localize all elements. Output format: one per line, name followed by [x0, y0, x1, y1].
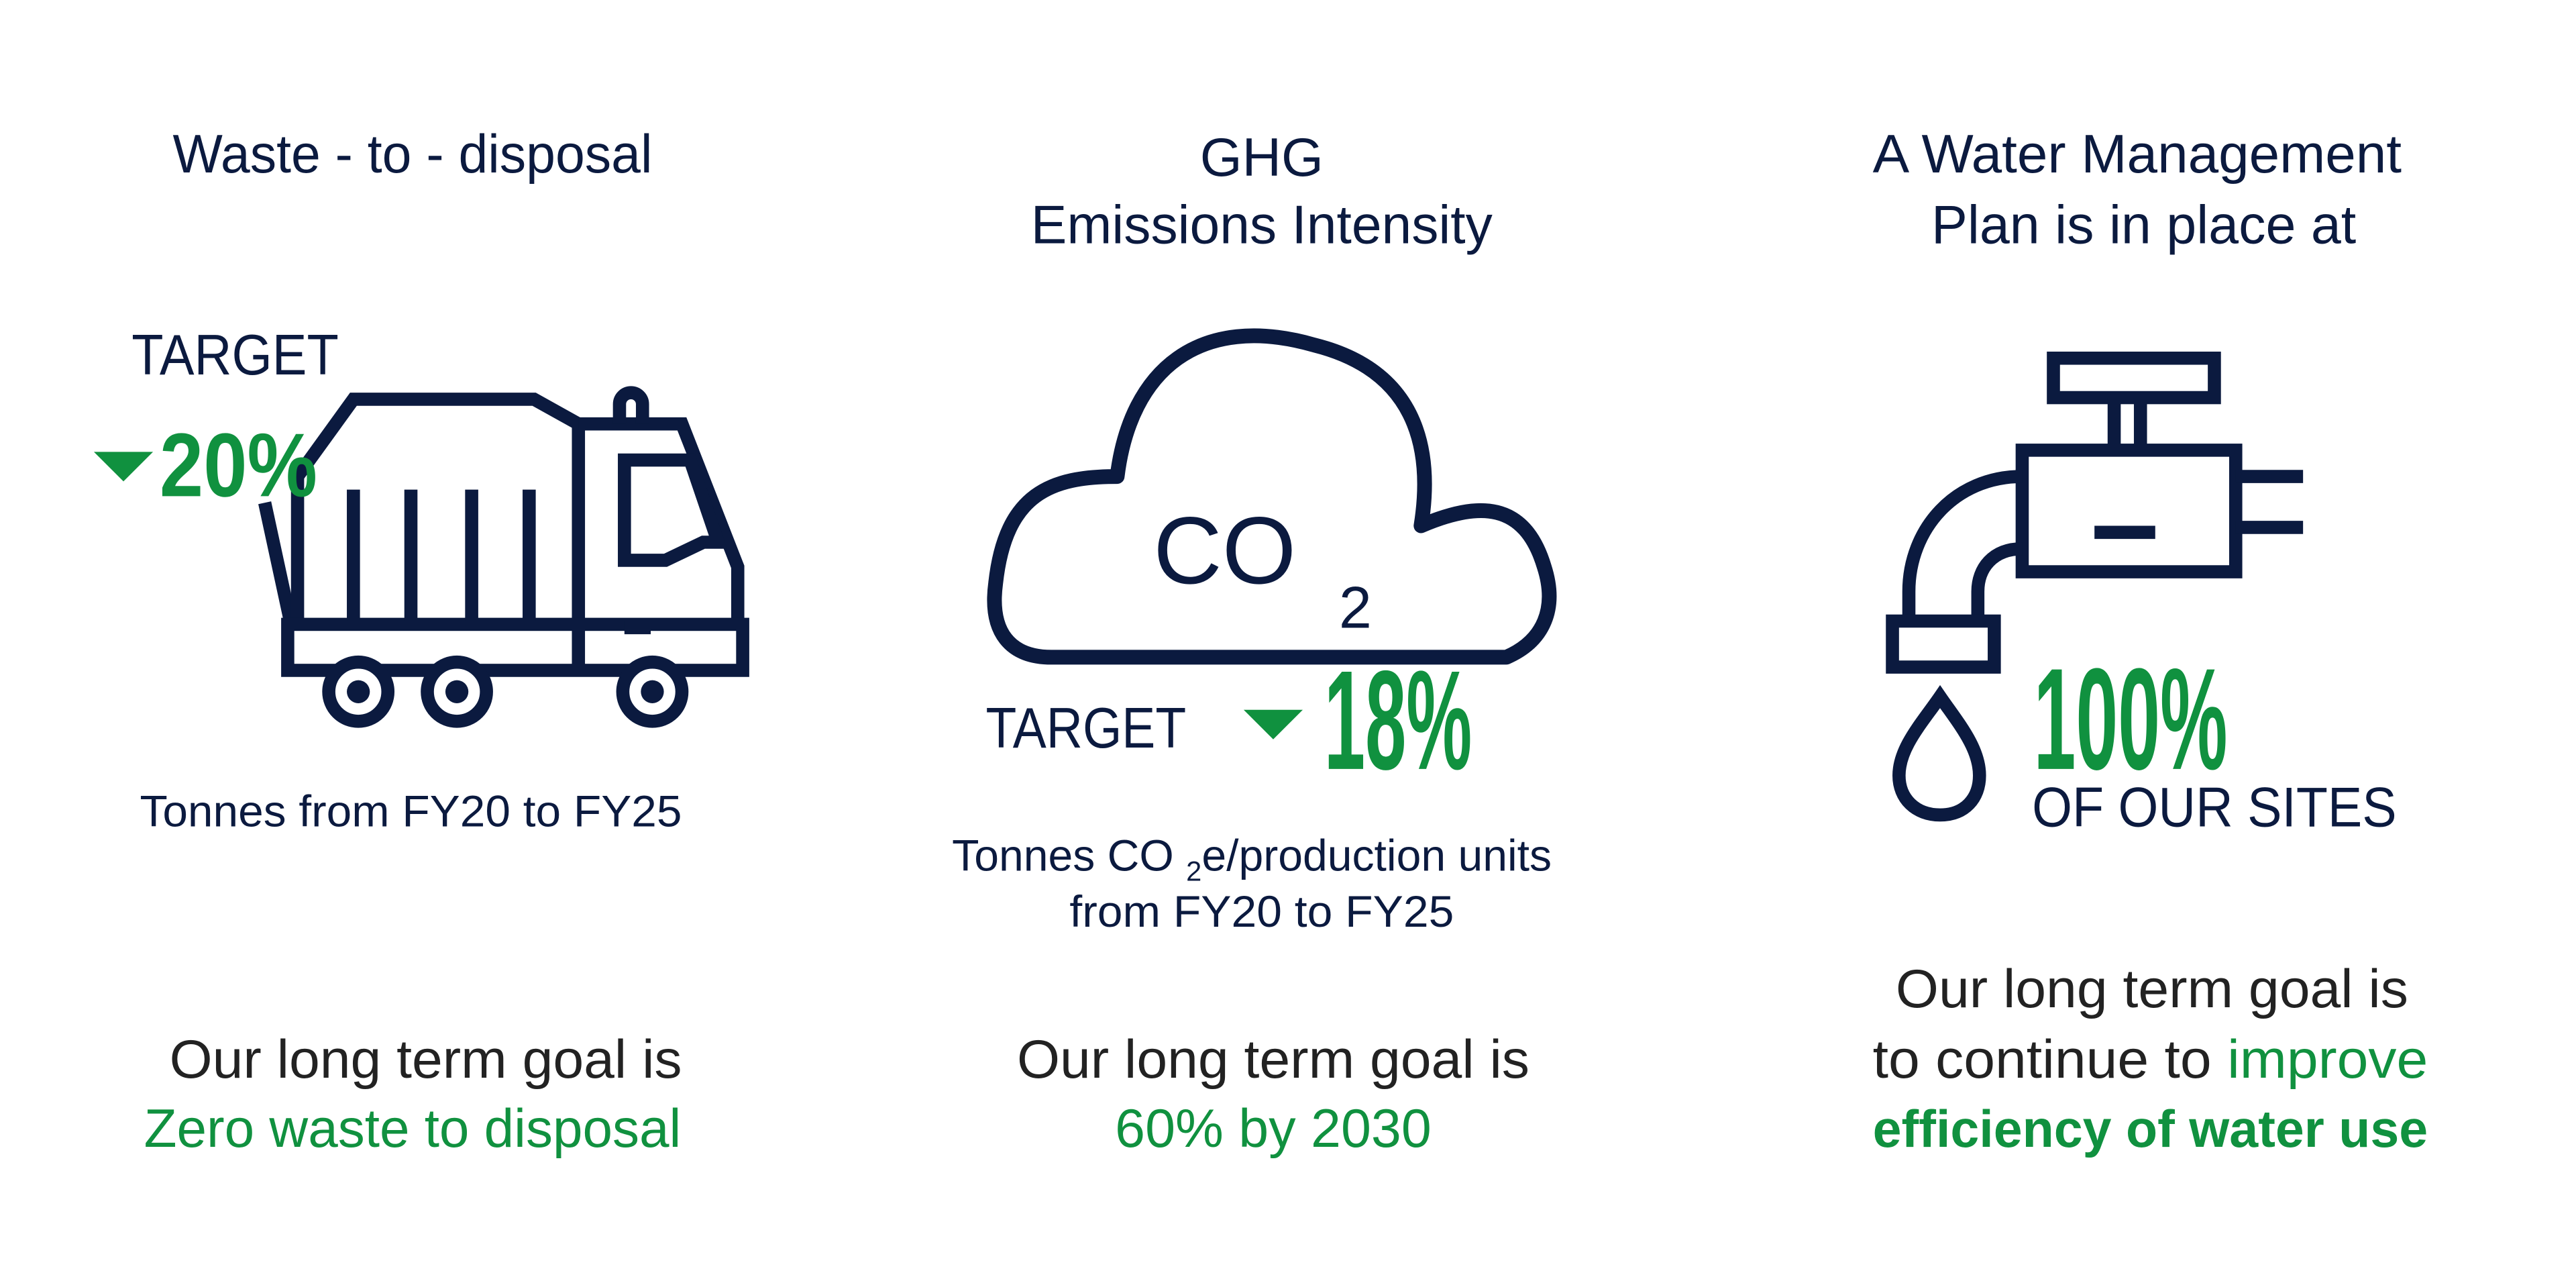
label: target 20%: 20%	[160, 414, 317, 515]
goal: ghg: 60% by 2030	[1115, 1099, 1432, 1159]
panel: water	[1873, 124, 2428, 1158]
goal: ghg	[1017, 1029, 1529, 1159]
heading: waste: Waste - to - disposal	[173, 124, 652, 185]
heading: water	[1873, 124, 2402, 255]
heading: water: A Water Management	[1873, 124, 2402, 185]
goal: waste	[144, 1029, 682, 1159]
caption: ghg: from FY20 to FY25	[1069, 887, 1454, 937]
caption: ghg: 2	[1186, 855, 1201, 886]
label: target 18%	[985, 641, 1472, 799]
label: target 20%	[94, 323, 339, 515]
heading: ghg: Emissions Intensity	[1031, 195, 1493, 255]
label: 100% of our sites: OF OUR SITES	[2032, 776, 2397, 839]
heading: water: Plan is in place at	[1931, 195, 2356, 255]
text: CO2: CO	[1153, 497, 1296, 604]
goal: water	[1873, 959, 2428, 1158]
goal: water: Our long term goal is	[1896, 959, 2408, 1019]
goal: ghg: Our long term goal is	[1017, 1029, 1529, 1090]
caption: waste: Tonnes from FY20 to FY25	[140, 787, 682, 837]
icon: truck	[265, 393, 743, 721]
label: 100% of our sites: 100%	[2034, 638, 2228, 800]
text: CO2	[1153, 497, 1372, 640]
goal: water: efficiency of water use	[1873, 1099, 2428, 1158]
goal: waste: Our long term goal is	[170, 1029, 682, 1090]
panel: ghg	[952, 128, 1552, 1159]
text: CO2: 2	[1339, 574, 1372, 640]
goal: water: to continue to improve	[1873, 1029, 2428, 1090]
heading: ghg: GHG	[1200, 128, 1324, 188]
panel: waste	[94, 124, 743, 1159]
heading: ghg	[1031, 128, 1493, 255]
icon: tap	[1892, 358, 2303, 815]
caption: ghg: e/production units	[1201, 831, 1552, 881]
goal: waste: Zero waste to disposal	[144, 1099, 681, 1159]
caption: ghg: Tonnes CO	[952, 831, 1174, 881]
label: target 18%: TARGET	[985, 696, 1186, 760]
caption: ghg	[952, 831, 1552, 937]
label: target 18%: 18%	[1324, 641, 1472, 799]
label: target 20%: TARGET	[131, 323, 339, 387]
icon: cloud	[994, 336, 1549, 657]
